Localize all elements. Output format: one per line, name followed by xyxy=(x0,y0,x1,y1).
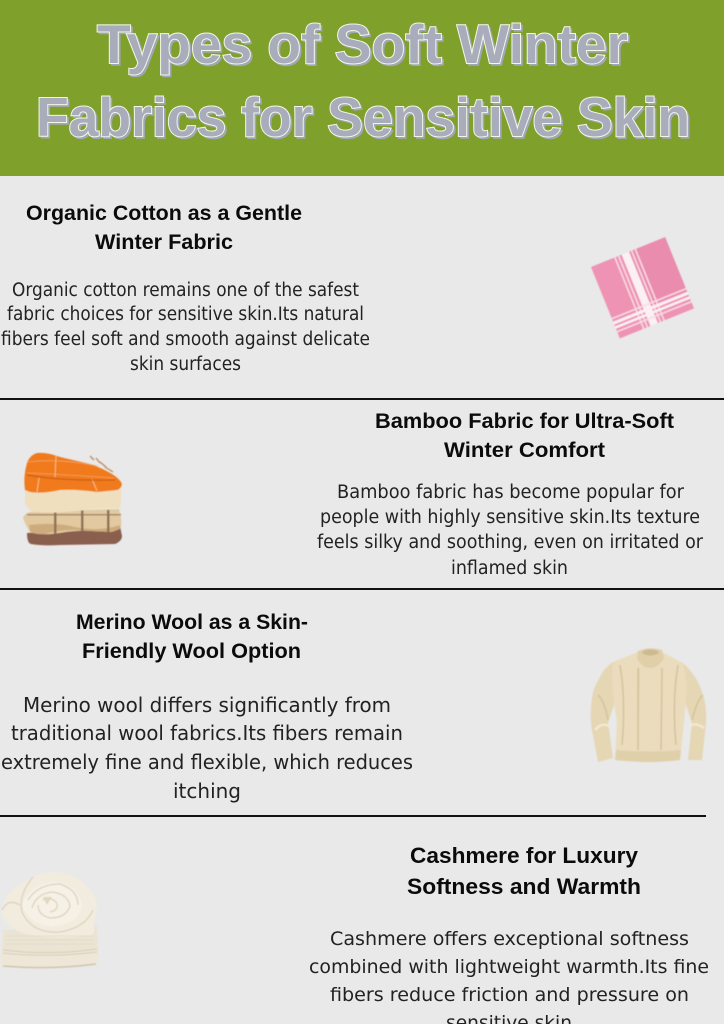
text: organic cotton description xyxy=(1,280,370,375)
text: bamboo fabric description: Bamboo fabric has become popular for xyxy=(337,482,684,503)
panel: organic cotton xyxy=(1,201,694,375)
text: merino wool description: Merino wool differs significantly from xyxy=(23,693,391,717)
divider line xyxy=(0,398,724,400)
panel: merino wool xyxy=(1,610,706,803)
heading: bamboo fabric: Winter Comfort xyxy=(444,438,605,462)
text: organic cotton description: skin surfaces xyxy=(130,354,241,375)
heading: merino wool: Merino Wool as a Skin- xyxy=(76,610,308,634)
heading: organic cotton: Organic Cotton as a Gentle xyxy=(26,201,302,225)
heading: bamboo fabric xyxy=(375,409,674,462)
icon: stack of blankets xyxy=(23,453,122,545)
icon: pink folded cloth xyxy=(591,237,694,338)
text: bamboo fabric description xyxy=(317,482,703,579)
text: merino wool description: extremely fine and flexible, which reduces xyxy=(1,750,413,774)
panel: bamboo fabric xyxy=(23,409,703,579)
text: merino wool description: traditional wool fabrics.Its fibers remain xyxy=(11,721,403,745)
heading: organic cotton: Winter Fabric xyxy=(95,230,233,254)
icon: cream sweater xyxy=(591,648,706,762)
text: bamboo fabric description: inflamed skin xyxy=(451,558,568,579)
header banner xyxy=(0,0,724,176)
text: merino wool description xyxy=(1,693,413,803)
text: merino wool description: itching xyxy=(173,779,241,803)
panel: cashmere xyxy=(0,843,709,1024)
text: bamboo fabric description: feels silky and soothing, even on irritated or xyxy=(317,532,703,553)
heading: bamboo fabric: Bamboo Fabric for Ultra-Soft xyxy=(375,409,674,433)
title: Fabrics for Sensitive Skin xyxy=(36,86,690,148)
title: Fabrics for Sensitive Skin xyxy=(38,88,692,150)
divider line xyxy=(0,588,724,590)
heading: merino wool: Friendly Wool Option xyxy=(82,639,301,663)
text: cashmere description: Cashmere offers exceptional softness xyxy=(330,928,689,950)
heading: cashmere: Cashmere for Luxury xyxy=(410,843,639,868)
heading: organic cotton xyxy=(26,201,302,254)
icon: rolled cream cashmere xyxy=(0,872,98,968)
title xyxy=(36,13,692,150)
text: bamboo fabric description: people with highly sensitive skin.Its texture xyxy=(320,507,700,528)
heading: merino wool xyxy=(76,610,308,663)
title: Types of Soft Winter xyxy=(99,15,630,77)
text: cashmere description: combined with lightweight warmth.Its fine xyxy=(309,956,709,978)
title: Types of Soft Winter xyxy=(97,13,628,75)
text: organic cotton description: fabric choices for sensitive skin.Its natural xyxy=(7,304,364,325)
text: organic cotton description: fibers feel soft and smooth against delicate xyxy=(1,329,370,350)
heading: cashmere xyxy=(407,843,641,899)
text: organic cotton description: Organic cotton remains one of the safest xyxy=(12,280,359,301)
text: cashmere description xyxy=(309,928,709,1024)
divider line xyxy=(0,815,706,817)
heading: cashmere: Softness and Warmth xyxy=(407,874,641,899)
text: cashmere description: fibers reduce friction and pressure on xyxy=(330,984,689,1006)
